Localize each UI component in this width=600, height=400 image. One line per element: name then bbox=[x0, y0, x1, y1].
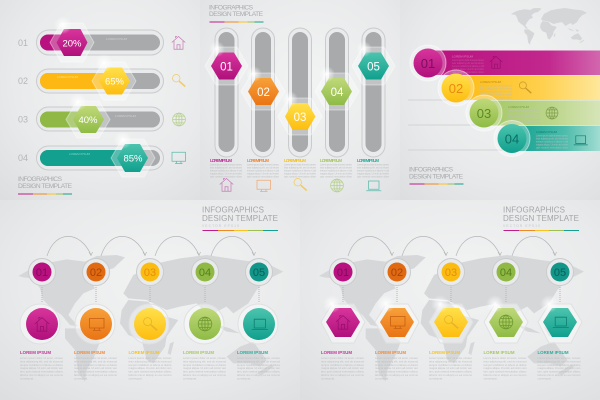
row 04: 85 percent slider: LOREM IPSUM bbox=[69, 152, 91, 156]
hex badge 03 bbox=[429, 295, 473, 343]
connectors bbox=[42, 287, 259, 302]
hexagon 02: 02 bbox=[257, 87, 270, 99]
captions: LOREM IPSUM bbox=[357, 158, 379, 163]
captions bbox=[20, 350, 281, 380]
icon: monitor bbox=[257, 180, 270, 192]
node 02: 02 bbox=[90, 267, 102, 279]
row 02: 65 percent slider: 65% bbox=[105, 76, 125, 88]
captions: LOREM IPSUM bbox=[247, 158, 269, 163]
node 04: 04 bbox=[199, 267, 211, 279]
title: INFOGRAPHICS bbox=[202, 206, 264, 214]
slider tracks bbox=[215, 28, 385, 157]
node 05 bbox=[546, 258, 574, 286]
node 01 bbox=[28, 258, 56, 286]
title: INFOGRAPHICS bbox=[18, 176, 63, 183]
world map bbox=[18, 255, 283, 382]
hexagon 04 bbox=[315, 66, 359, 110]
arrows bbox=[47, 236, 256, 256]
shelf lines bbox=[408, 100, 526, 150]
title: DESIGN TEMPLATE bbox=[202, 214, 278, 223]
ribbon 04: LOREM IPSUM bbox=[536, 130, 558, 134]
captions: LOREM IPSUM bbox=[429, 350, 460, 355]
title bbox=[209, 4, 264, 22]
node 03 bbox=[136, 258, 164, 286]
ribbon 02: 02 bbox=[449, 81, 463, 96]
icon: globe bbox=[331, 179, 343, 192]
row numbers bbox=[18, 38, 28, 163]
row 03: 40 percent slider: LOREM IPSUM bbox=[115, 114, 137, 118]
ribbon 02: LOREM IPSUM bbox=[480, 80, 502, 84]
captions: LOREM IPSUM bbox=[183, 350, 214, 355]
node 02: 02 bbox=[391, 267, 403, 279]
panel: progress sliders bbox=[0, 0, 200, 200]
hexagon 02 bbox=[241, 66, 285, 110]
connectors bbox=[343, 287, 560, 302]
title: VECTOR EPS10 bbox=[202, 224, 239, 228]
panel: hexagon timeline bbox=[300, 200, 600, 400]
arrows bbox=[348, 236, 556, 256]
title bbox=[18, 176, 73, 194]
node 01 bbox=[330, 258, 356, 286]
captions: LOREM IPSUM bbox=[20, 350, 51, 355]
row 04: 85 percent slider bbox=[36, 131, 164, 177]
title bbox=[202, 206, 278, 230]
icon: magnifier bbox=[172, 74, 185, 86]
captions: LOREM IPSUM bbox=[128, 350, 160, 355]
node 05: 05 bbox=[554, 267, 566, 279]
captions bbox=[321, 350, 581, 380]
node 03: 03 bbox=[144, 267, 156, 279]
icon: magnifier bbox=[294, 178, 307, 190]
ribbon 04: 04 bbox=[505, 132, 519, 146]
icon: globe bbox=[173, 113, 185, 126]
row 02: 65 percent slider bbox=[36, 54, 164, 100]
title: INFOGRAPHICS bbox=[503, 206, 565, 214]
hex badge 04 bbox=[484, 295, 528, 343]
row 03: 40 percent slider: 40% bbox=[78, 115, 98, 126]
hex badge 01 bbox=[321, 295, 365, 343]
captions: LOREM IPSUM bbox=[320, 158, 342, 163]
ribbon 01: 01 bbox=[421, 56, 435, 71]
captions: LOREM IPSUM bbox=[538, 350, 569, 355]
title: DESIGN TEMPLATE bbox=[409, 174, 464, 180]
badge 04 with globe bbox=[184, 304, 224, 344]
row 03: 40 percent slider bbox=[36, 93, 164, 138]
captions: LOREM IPSUM bbox=[74, 350, 105, 355]
title: VECTOR EPS10 bbox=[503, 224, 540, 228]
row 01: 20 percent slider: LOREM IPSUM bbox=[106, 37, 128, 41]
hex badge 05 bbox=[538, 295, 582, 343]
title: DESIGN TEMPLATE bbox=[503, 214, 579, 223]
node 01: 01 bbox=[337, 267, 349, 279]
captions: LOREM IPSUM bbox=[484, 350, 515, 355]
world map bbox=[319, 255, 584, 382]
title: INFOGRAPHICS bbox=[409, 166, 454, 174]
panel: circle timeline bbox=[0, 200, 300, 400]
node 01: 01 bbox=[36, 267, 48, 279]
title: DESIGN TEMPLATE bbox=[209, 11, 264, 18]
captions: LOREM IPSUM bbox=[210, 158, 232, 163]
node 05 bbox=[246, 258, 272, 286]
captions: LOREM IPSUM bbox=[284, 158, 306, 163]
icon: house bbox=[220, 178, 233, 191]
badge 01 with house bbox=[20, 304, 60, 344]
row 01: 20 percent slider bbox=[36, 16, 164, 62]
hexagon 05 bbox=[352, 41, 395, 85]
hexagon 03: 03 bbox=[294, 112, 306, 124]
node 04: 04 bbox=[500, 267, 512, 279]
row 01: 20 percent slider: 20% bbox=[62, 38, 82, 50]
row numbers: 02 bbox=[18, 76, 28, 86]
title: DESIGN TEMPLATE bbox=[18, 183, 73, 190]
hexagon 01: 01 bbox=[220, 62, 233, 74]
row numbers: 01 bbox=[18, 38, 28, 48]
title bbox=[409, 166, 464, 184]
node 03 bbox=[438, 258, 464, 286]
captions: LOREM IPSUM bbox=[237, 350, 268, 355]
captions: LOREM IPSUM bbox=[375, 350, 406, 355]
ribbon 01 bbox=[410, 45, 600, 81]
panel: ribbons bbox=[400, 0, 600, 200]
row numbers: 04 bbox=[18, 153, 28, 163]
title: INFOGRAPHICS bbox=[209, 4, 254, 12]
hexagon 03 bbox=[278, 91, 322, 135]
hexagon 01 bbox=[205, 41, 248, 85]
hexagon 04: 04 bbox=[331, 87, 344, 99]
panel: vertical sliders bbox=[200, 0, 400, 200]
icon: laptop bbox=[366, 181, 381, 191]
row numbers: 03 bbox=[18, 114, 28, 124]
ribbon 01: LOREM IPSUM bbox=[452, 54, 474, 58]
ribbon 03 bbox=[466, 95, 600, 131]
badge 03 with magnifier bbox=[129, 304, 169, 344]
node 04 bbox=[492, 258, 520, 286]
hex badge 02 bbox=[375, 295, 419, 343]
ribbon 03: LOREM IPSUM bbox=[508, 105, 530, 109]
row 02: 65 percent slider: LOREM IPSUM bbox=[57, 75, 79, 79]
ribbon 02 bbox=[438, 70, 600, 106]
captions bbox=[210, 158, 390, 178]
icon: monitor bbox=[172, 152, 186, 164]
icon: house bbox=[172, 36, 185, 49]
badge 02 with monitor bbox=[75, 304, 115, 344]
row 04: 85 percent slider: 85% bbox=[123, 154, 143, 164]
node 05: 05 bbox=[253, 267, 265, 279]
node 03: 03 bbox=[445, 267, 457, 279]
ribbon 03: 03 bbox=[477, 106, 491, 121]
captions: LOREM IPSUM bbox=[321, 350, 352, 355]
hexagon 05: 05 bbox=[367, 62, 380, 74]
world map small bbox=[511, 8, 587, 45]
title bbox=[503, 206, 579, 230]
node 02 bbox=[384, 258, 410, 286]
ribbon 04 bbox=[494, 120, 600, 156]
node 04 bbox=[192, 258, 218, 286]
node 02 bbox=[82, 258, 110, 286]
badge 05 with laptop bbox=[238, 304, 278, 344]
